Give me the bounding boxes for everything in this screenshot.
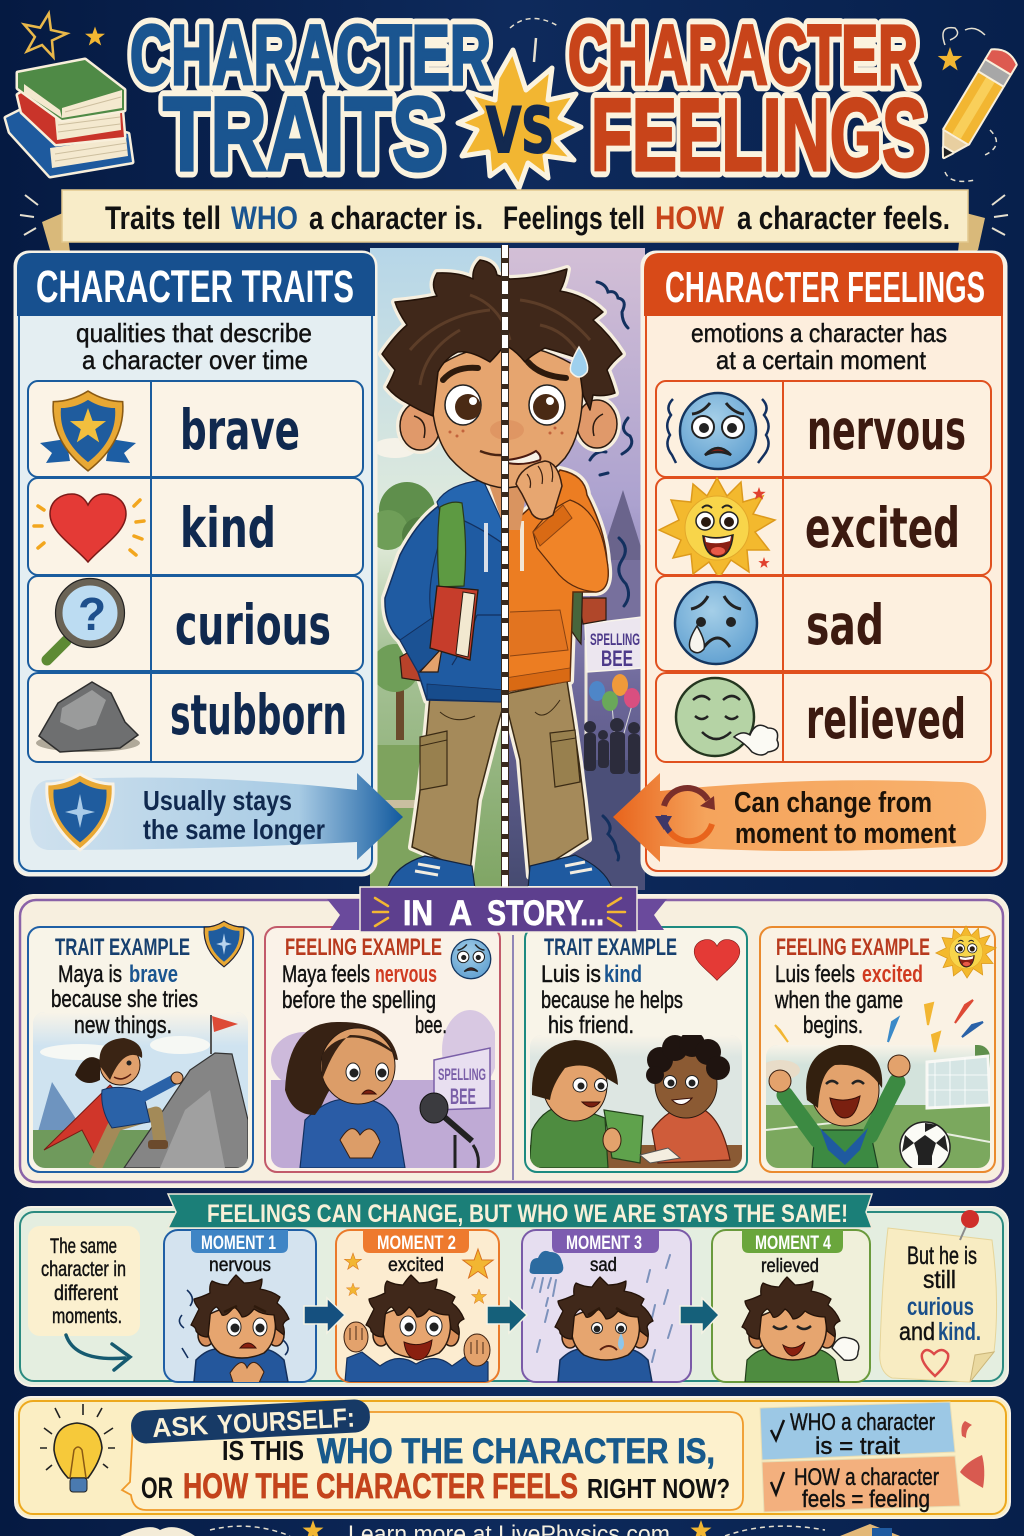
nervous squiggles xyxy=(590,282,632,860)
decorative star doodles xyxy=(19,9,996,181)
subtitle banner: Feelings tell xyxy=(503,200,645,236)
sweat drop xyxy=(570,347,588,377)
row: sad: sad xyxy=(806,593,884,657)
text: feeling example maya: Maya feels xyxy=(282,961,370,988)
note: the same character: character in xyxy=(41,1258,126,1281)
title: character traits: TRAITS xyxy=(163,76,444,193)
boy split character xyxy=(382,245,622,890)
text: trait example luis: because he helps xyxy=(541,987,683,1014)
icon: excited sun xyxy=(659,478,775,578)
text: trait example luis: TRAIT EXAMPLE xyxy=(544,934,677,961)
definition text xyxy=(691,318,947,375)
icon: red pin xyxy=(960,1210,979,1240)
confetti xyxy=(775,1000,983,1052)
text: trait example maya xyxy=(51,934,198,1039)
text: feeling example luis: Luis feels xyxy=(775,961,855,988)
speech bubble: WHO THE CHARACTER IS, xyxy=(317,1432,715,1471)
text: feeling example maya: FEELING EXAMPLE xyxy=(285,934,442,961)
row: kind: kind xyxy=(180,496,276,560)
small red marks xyxy=(960,1421,984,1488)
orange hoodie half xyxy=(505,470,608,692)
text: trait example luis: his friend. xyxy=(548,1012,634,1039)
speech bubble xyxy=(122,1412,743,1510)
icon: magnifying glass xyxy=(47,578,124,660)
subtitle banner: a character is. xyxy=(309,200,483,236)
backpack xyxy=(400,495,606,684)
text: feeling example maya: bee. xyxy=(415,1012,447,1039)
row: stubborn xyxy=(28,673,363,762)
moment 4 xyxy=(712,1230,870,1382)
subtitle banner xyxy=(20,190,1008,262)
text: trait example luis xyxy=(541,934,683,1039)
note: how a character feels feeling xyxy=(762,1456,960,1513)
icon: stack of books xyxy=(6,60,132,176)
white sticker outline xyxy=(382,260,622,876)
ribbon: feelings can change: FEELINGS CAN CHANGE, BUT WHO WE ARE STAYS THE SAME! xyxy=(207,1200,848,1228)
text: feeling example maya: before the spelling xyxy=(282,987,436,1014)
moment 1 xyxy=(164,1230,316,1385)
arrow: can change from moment to moment: moment to moment xyxy=(735,818,956,850)
text: trait example maya: brave xyxy=(129,961,178,988)
note: who a character is trait: is = trait xyxy=(815,1433,900,1460)
title: character traits: TRAITS xyxy=(163,76,444,193)
text: feeling example luis: when the game xyxy=(774,987,903,1014)
moment 1: nervous xyxy=(209,1255,271,1276)
icon: heart xyxy=(34,494,144,562)
icon: cycle arrows xyxy=(655,788,715,841)
face xyxy=(431,345,583,488)
moment 2 xyxy=(336,1230,499,1382)
footer doodles xyxy=(120,1520,900,1536)
icon: heart xyxy=(694,940,740,980)
text: trait example luis: Luis is xyxy=(541,961,601,988)
hair xyxy=(382,260,622,416)
arrow: can change from moment to moment xyxy=(613,773,986,862)
text: feeling example luis: FEELING EXAMPLE xyxy=(776,934,930,961)
scene: nervous girl with microphone: BEE xyxy=(450,1084,476,1109)
footer xyxy=(120,1520,900,1536)
flow arrows xyxy=(304,1298,719,1333)
ribbon: feelings can change xyxy=(168,1194,872,1228)
row: curious xyxy=(28,576,363,671)
text: trait example luis: kind xyxy=(604,961,642,988)
note: who a character is trait xyxy=(760,1402,955,1460)
note: but he is still curious and kind: still xyxy=(923,1266,956,1294)
note: the same character: different xyxy=(54,1282,118,1305)
row: kind xyxy=(28,478,363,575)
tag: ask yourself xyxy=(130,1399,371,1444)
neck xyxy=(484,470,530,530)
panel: character traits xyxy=(15,252,403,875)
speech bubble: RIGHT NOW? xyxy=(587,1473,730,1504)
spelling bee sign: BEE xyxy=(601,646,633,671)
icon: light bulb xyxy=(40,1404,115,1492)
boy: sad xyxy=(555,1277,653,1382)
ribbon: in a story: A xyxy=(449,894,472,933)
heading: character traits xyxy=(17,253,375,316)
note: the same character xyxy=(28,1226,140,1336)
card: feeling example maya xyxy=(265,927,500,1172)
title: character traits: CHARACTER xyxy=(130,8,491,102)
boy: nervous xyxy=(179,1275,289,1385)
text: trait example maya: TRAIT EXAMPLE xyxy=(55,934,190,961)
tag: moment 4 xyxy=(742,1230,843,1254)
boy: relieved xyxy=(742,1277,859,1382)
row: brave xyxy=(28,381,363,477)
arrow: curved xyxy=(66,1335,130,1370)
arrow: can change from moment to moment: Can change from xyxy=(734,787,932,819)
row: nervous xyxy=(656,381,991,477)
icon: pencil xyxy=(932,46,1018,164)
note: who a character is trait: WHO a character xyxy=(790,1409,935,1436)
arrow: usually stays the same longer: Usually stays xyxy=(143,785,292,816)
moment 2: excited xyxy=(388,1255,444,1276)
scene: two friends with book xyxy=(529,1031,742,1170)
tag: ask yourself: ASK xyxy=(151,1410,209,1443)
icon: magnifying glass: ? xyxy=(78,588,106,640)
note: but he is still curious and kind: curious xyxy=(907,1293,974,1321)
panel: character feelings xyxy=(613,252,1006,875)
subtitle banner: WHO xyxy=(231,200,298,236)
note: how a character feels feeling: feels = feeling xyxy=(802,1486,930,1513)
text: feeling example luis: begins. xyxy=(803,1012,863,1039)
ribbon: in a story: IN xyxy=(403,894,433,933)
tag: ask yourself: YOURSELF: xyxy=(216,1403,356,1440)
ears xyxy=(400,400,617,450)
row: stubborn: stubborn xyxy=(170,683,347,747)
blue hoodie half xyxy=(385,480,505,702)
ribbon: in a story: STORY... xyxy=(487,894,604,933)
stars around xyxy=(344,1249,493,1303)
subtitle banner: a character feels. xyxy=(737,200,950,236)
definition text: qualities that describe xyxy=(76,318,312,348)
note: but he is still curious and kind: and xyxy=(899,1318,935,1346)
subtitle banner: HOW xyxy=(655,200,725,236)
tag: moment 3: MOMENT 3 xyxy=(566,1233,642,1254)
icon: excited sun xyxy=(936,926,996,978)
heading: character traits: CHARACTER TRAITS xyxy=(36,261,354,312)
scene: boy cheering at soccer field xyxy=(760,1044,991,1172)
title: character feelings xyxy=(568,8,927,192)
crowd silhouettes xyxy=(584,718,640,774)
icon: heart outline xyxy=(922,1350,948,1376)
scene: nervous girl with microphone: SPELLING xyxy=(438,1065,486,1084)
note: but he is still curious and kind xyxy=(880,1210,997,1382)
title: character traits xyxy=(130,8,491,193)
tag: moment 2: MOMENT 2 xyxy=(377,1233,456,1254)
text: feeling example maya: nervous xyxy=(375,961,437,988)
moment 4: relieved xyxy=(761,1256,819,1277)
card: trait example luis xyxy=(525,927,747,1172)
rain cloud and raindrops xyxy=(530,1251,672,1362)
speech bubble: OR xyxy=(141,1472,173,1505)
text: trait example maya: Maya is xyxy=(58,961,122,988)
row: brave: brave xyxy=(180,398,300,462)
panel: ask yourself xyxy=(15,1397,1010,1518)
icon: relieved face xyxy=(676,678,778,756)
icon: rock xyxy=(36,682,140,752)
panel: feelings can change xyxy=(15,1194,1008,1386)
moment 3: sad xyxy=(590,1255,617,1276)
row: curious: curious xyxy=(175,593,331,657)
trousers xyxy=(412,681,588,876)
note: but he is still curious and kind: But he is xyxy=(907,1242,977,1270)
spelling bee sign xyxy=(585,617,642,745)
panel: in a story xyxy=(15,887,1008,1187)
icon: nervous face xyxy=(451,939,491,979)
icon: shield with star xyxy=(40,391,136,471)
card: trait example maya xyxy=(28,921,253,1172)
spelling bee sign: SPELLING xyxy=(590,630,640,649)
vertical divider xyxy=(512,935,514,1180)
icon: shield xyxy=(204,921,244,967)
row: excited xyxy=(656,478,991,578)
arrow: usually stays the same longer xyxy=(30,773,403,860)
definition text: emotions a character has xyxy=(691,318,947,348)
text: feeling example maya xyxy=(282,934,447,1039)
note: but he is still curious and kind: kind. xyxy=(938,1318,981,1346)
shoes xyxy=(388,855,612,889)
center scene: two backgrounds xyxy=(368,248,645,890)
scene: girl climbing rock xyxy=(30,1012,248,1170)
title block xyxy=(6,8,1018,193)
definition text: a character over time xyxy=(82,345,308,375)
text: feeling example luis xyxy=(774,934,930,1039)
red book xyxy=(430,586,478,660)
ribbon: in a story xyxy=(327,887,667,933)
row: relieved xyxy=(656,673,991,762)
note: how a character feels feeling: HOW a character xyxy=(794,1464,939,1491)
speech bubble: HOW THE CHARACTER FEELS xyxy=(183,1467,578,1506)
subtitle banner: Traits tell xyxy=(105,200,221,236)
tag: moment 1: MOMENT 1 xyxy=(201,1233,276,1254)
arrow: usually stays the same longer: the same longer xyxy=(143,814,325,845)
text: trait example maya: new things. xyxy=(74,1012,172,1039)
definition text xyxy=(76,318,312,375)
balloons xyxy=(589,674,640,740)
text: feeling example luis: excited xyxy=(862,961,923,988)
tag: moment 4: MOMENT 4 xyxy=(755,1233,831,1254)
speech bubble: IS THIS xyxy=(222,1435,304,1466)
boy: excited xyxy=(344,1275,490,1382)
moment 3 xyxy=(522,1230,691,1382)
row: sad xyxy=(656,576,991,671)
icon: small shield xyxy=(47,774,113,850)
nervous fist xyxy=(516,461,562,519)
definition text: at a certain moment xyxy=(716,345,927,375)
icon: sad face xyxy=(675,582,757,664)
vs starburst xyxy=(458,50,581,188)
scene: nervous girl with microphone xyxy=(271,1005,498,1170)
card: feeling example luis xyxy=(760,926,996,1172)
centre dashed line xyxy=(501,245,509,890)
vs starburst: VS xyxy=(486,94,554,167)
title: character traits: CHARACTER xyxy=(130,8,491,102)
icon: nervous face xyxy=(667,393,769,469)
text: trait example maya: because she tries xyxy=(51,986,198,1013)
note: the same character: The same xyxy=(50,1235,117,1258)
note: the same character: moments. xyxy=(52,1305,122,1328)
